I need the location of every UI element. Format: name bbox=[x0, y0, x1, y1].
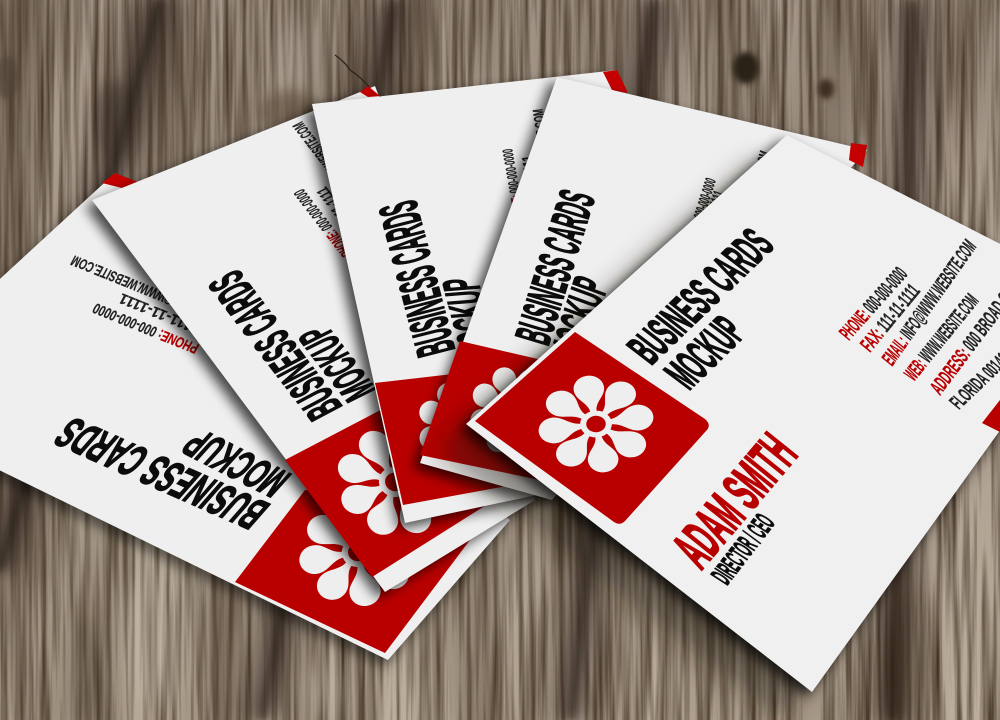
card 3: near upright bbox=[305, 70, 628, 529]
card 1 heading: mockup: MOCKUP bbox=[173, 420, 300, 505]
card 4 logo bbox=[470, 367, 526, 452]
card 3: near upright: MOCKUP bbox=[431, 277, 510, 363]
wood knots bbox=[0, 52, 834, 160]
card 3 red block bbox=[375, 365, 540, 505]
card 4 red block bbox=[420, 341, 620, 480]
card 4: rotated right: BUSINESS CARDS bbox=[505, 184, 606, 350]
card 1 logo bbox=[299, 514, 409, 606]
card 5 name: ADAM SMITH bbox=[660, 422, 809, 579]
card 5 heading: business cards: BUSINESS CARDS bbox=[617, 221, 784, 373]
card 4: rotated right bbox=[413, 77, 867, 505]
card 1 face bbox=[0, 173, 510, 660]
card 3: near upright: BUSINESS CARDS bbox=[369, 195, 467, 362]
card 2: rotated left: FAX: 111-11-1111 bbox=[313, 184, 375, 252]
card 3: near upright: 111-11-1111 bbox=[519, 155, 543, 211]
card 5 red block bbox=[475, 332, 709, 524]
card 2 red block bbox=[285, 405, 510, 577]
card 2 logo bbox=[338, 430, 432, 535]
card 1: far left, rotated bbox=[0, 173, 510, 667]
card 2 face bbox=[92, 86, 535, 592]
card 5: front card with full details bbox=[436, 135, 1000, 718]
card 2 heading: mockup: MOCKUP bbox=[289, 318, 387, 408]
card 4 red tab bbox=[849, 143, 867, 167]
card 1 red tab bbox=[102, 173, 138, 188]
card 4 heading: mockup: MOCKUP bbox=[542, 271, 618, 369]
card 2 red tab bbox=[360, 86, 380, 97]
card 5 red corner block bbox=[982, 400, 1000, 432]
card 4 face bbox=[420, 77, 867, 500]
card 5 face bbox=[466, 135, 1000, 692]
card 2: rotated left: PHONE: 000-000-0000 bbox=[290, 187, 356, 259]
card 3 red tab bbox=[603, 70, 628, 93]
card 3 face bbox=[312, 70, 617, 523]
card 5: front card with full details: DIRECTOR / CEO bbox=[705, 509, 781, 590]
card 2: rotated left bbox=[85, 86, 535, 598]
card 2 heading: business cards: BUSINESS CARDS bbox=[197, 263, 353, 428]
card 3 logo bbox=[419, 383, 446, 446]
card 5 logo bbox=[529, 367, 663, 481]
card 5 heading: mockup: MOCKUP bbox=[655, 308, 756, 398]
card 1 red block bbox=[235, 490, 500, 653]
